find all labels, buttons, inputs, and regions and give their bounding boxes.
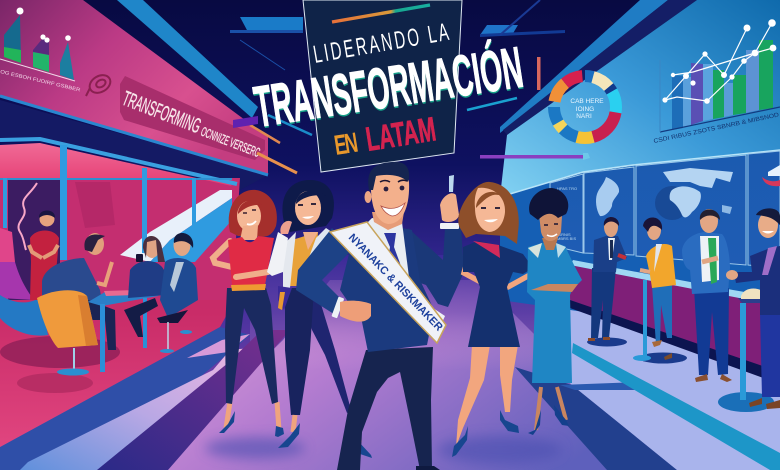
hand and pen — [440, 193, 459, 222]
right floor stripes — [515, 300, 780, 470]
reception counter — [570, 260, 780, 384]
standing host in red — [29, 210, 59, 300]
screens wall — [500, 152, 780, 340]
central man with sash — [296, 162, 464, 470]
blouse and blazer — [288, 232, 318, 286]
dark band under sign — [0, 100, 268, 190]
floor shadows under figures — [205, 436, 562, 464]
sash — [330, 222, 446, 343]
donut label: IOING — [576, 106, 594, 113]
seated man — [42, 233, 116, 350]
pants — [225, 288, 278, 404]
mini bar chart — [0, 8, 75, 81]
donut label: NARI — [576, 113, 592, 120]
back leg — [300, 288, 351, 413]
right group: man with green tie — [682, 209, 732, 382]
center floor — [150, 255, 700, 470]
features — [243, 210, 256, 213]
right group: man at lectern — [718, 208, 780, 412]
seated man in suit — [157, 233, 198, 353]
right cuff — [431, 308, 445, 325]
raised arm — [408, 226, 464, 307]
face — [475, 188, 505, 232]
smile — [381, 203, 405, 216]
screens highlight rim — [500, 150, 780, 197]
hair — [229, 190, 277, 237]
sign headline: OCNNIZE VERSERC — [199, 124, 262, 160]
right group: man in orange jacket — [633, 217, 687, 364]
dress — [463, 241, 533, 347]
ship emblem on screen — [762, 165, 780, 186]
heels — [219, 411, 235, 433]
face — [237, 201, 261, 231]
orange chair — [37, 290, 98, 376]
title line 3 — [332, 110, 438, 162]
woman in red top — [213, 190, 284, 437]
legs skin — [226, 402, 279, 430]
left hand — [340, 301, 371, 322]
map left — [596, 177, 619, 216]
screen caption: MBRS BIS — [557, 236, 576, 241]
lounge seat — [0, 228, 48, 336]
right group: man in navy suit — [587, 217, 627, 346]
right data wall — [500, 0, 780, 384]
crossed arms — [531, 284, 578, 292]
neon squiggle — [18, 183, 37, 250]
left building facade — [0, 0, 268, 190]
sign text plate — [120, 76, 265, 160]
posts — [3, 145, 196, 260]
title line 1: LIDERANDO LA — [311, 18, 451, 69]
cafe table — [88, 290, 158, 372]
screen caption: HPAS TRO — [557, 186, 577, 191]
hair — [368, 162, 409, 190]
sash text: NYANAKC & RISKMAKER — [346, 232, 445, 334]
sign bottom edge — [0, 96, 268, 175]
decorative streaks — [230, 0, 590, 173]
front leg — [285, 288, 314, 415]
woman with brown hair — [452, 182, 537, 457]
blue roof band — [117, 0, 258, 118]
pink sign panel — [0, 0, 268, 175]
title line 3: EN — [332, 128, 360, 162]
ceiling — [0, 143, 232, 186]
left cafe interior — [0, 139, 240, 447]
arm — [213, 241, 236, 268]
face and hair — [542, 238, 558, 250]
floor shadows — [0, 336, 120, 368]
pants — [337, 347, 433, 470]
donut chart — [554, 76, 616, 138]
dress — [527, 243, 582, 383]
eyes and brows — [380, 180, 407, 182]
left arm — [296, 228, 352, 316]
jacket — [340, 222, 434, 352]
left floor stripes — [0, 327, 290, 470]
line and bar chart: CSDI RIBUS ZSOTS SBNRB & MIBSNOD — [653, 112, 780, 145]
face — [303, 232, 318, 250]
swirl icon — [86, 72, 114, 96]
seated woman — [124, 236, 166, 337]
shirt and tie — [368, 218, 410, 290]
sign small caption: OG ESBOH FUOIRF GSBBER — [0, 69, 81, 93]
title line 3: LATAM — [363, 110, 438, 159]
hair — [282, 180, 334, 232]
woman in blue dress — [527, 188, 582, 435]
arms — [464, 262, 537, 287]
donut label — [570, 98, 604, 120]
screen caption: GRNIS — [558, 232, 571, 237]
world map — [655, 168, 733, 220]
hand — [236, 272, 268, 277]
woman with black hair — [267, 180, 372, 458]
screen caption — [557, 186, 577, 241]
accent line — [332, 5, 430, 22]
title panel — [250, 0, 527, 172]
top — [228, 236, 274, 285]
neck and head — [372, 212, 404, 230]
legs — [456, 345, 490, 447]
line and bar chart — [653, 19, 780, 145]
hand near face — [280, 221, 292, 234]
shoe — [416, 466, 440, 470]
heels — [452, 426, 468, 457]
dashboard screens — [550, 151, 780, 268]
sign headline: TRANSFORMING — [119, 87, 204, 138]
donut label: CAB HERE — [570, 98, 604, 105]
